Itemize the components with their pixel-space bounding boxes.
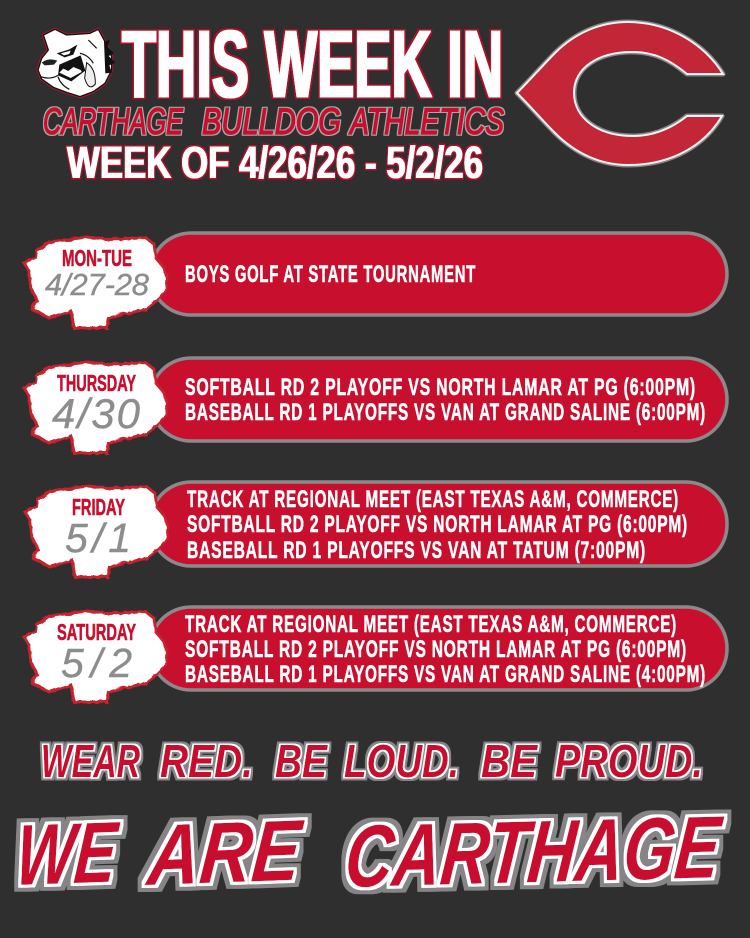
slogan: wear red be loud be proud: PROUD. [555, 735, 703, 787]
subtitle: carthage bulldog athletics [43, 101, 504, 142]
icon: red C logo [517, 22, 723, 165]
date: 5/1 [65, 515, 131, 561]
heading: week of dates: WEEK OF 4/26/26 - 5/2/26 [67, 137, 483, 188]
day label: FRIDAY [72, 494, 125, 520]
slogan: wear red be loud be proud [41, 735, 703, 787]
slogan: wear red be loud be proud: LOUD. [344, 735, 459, 787]
event text: BOYS GOLF AT STATE TOURNAMENT [185, 261, 476, 288]
date: 4/27-28 [45, 267, 150, 302]
day label: THURSDAY [57, 370, 136, 396]
event pill: saturday games [150, 607, 727, 690]
slogan: wear red be loud be proud: WEAR [41, 735, 140, 787]
date: 5/2 [61, 640, 132, 686]
slogan: we are carthage [12, 797, 727, 906]
event text [185, 611, 706, 688]
subtitle: carthage bulldog athletics: CARTHAGE [43, 101, 184, 142]
date badge: saturday [24, 611, 167, 702]
slogan: wear red be loud be proud: BE [275, 735, 328, 787]
panel: saturday row [24, 607, 727, 702]
date badge: thursday [24, 362, 167, 453]
date badge: mon-tue [24, 237, 167, 328]
slogan: wear red be loud be proud: BE [481, 735, 538, 787]
panel: friday row [25, 482, 727, 577]
icon: bulldog mascot logo [38, 29, 115, 97]
panel: monday-tuesday row [24, 233, 727, 328]
date: 4/30 [52, 390, 141, 437]
event pill: friday games [150, 482, 727, 566]
subtitle: carthage bulldog athletics: BULLDOG [202, 101, 341, 142]
day label: MON-TUE [62, 245, 132, 271]
subtitle: carthage bulldog athletics: ATHLETICS [348, 101, 504, 142]
day label: SATURDAY [57, 619, 136, 645]
event text [187, 486, 688, 564]
event text [185, 374, 706, 426]
slogan: we are carthage: WE [12, 804, 122, 904]
slogan: we are carthage: ARE [143, 803, 307, 904]
event pill: golf [150, 233, 727, 315]
event pill: thursday games [150, 358, 727, 441]
date badge: friday [25, 486, 168, 577]
slogan: wear red be loud be proud: RED. [160, 735, 253, 787]
panel: thursday row [24, 358, 727, 453]
